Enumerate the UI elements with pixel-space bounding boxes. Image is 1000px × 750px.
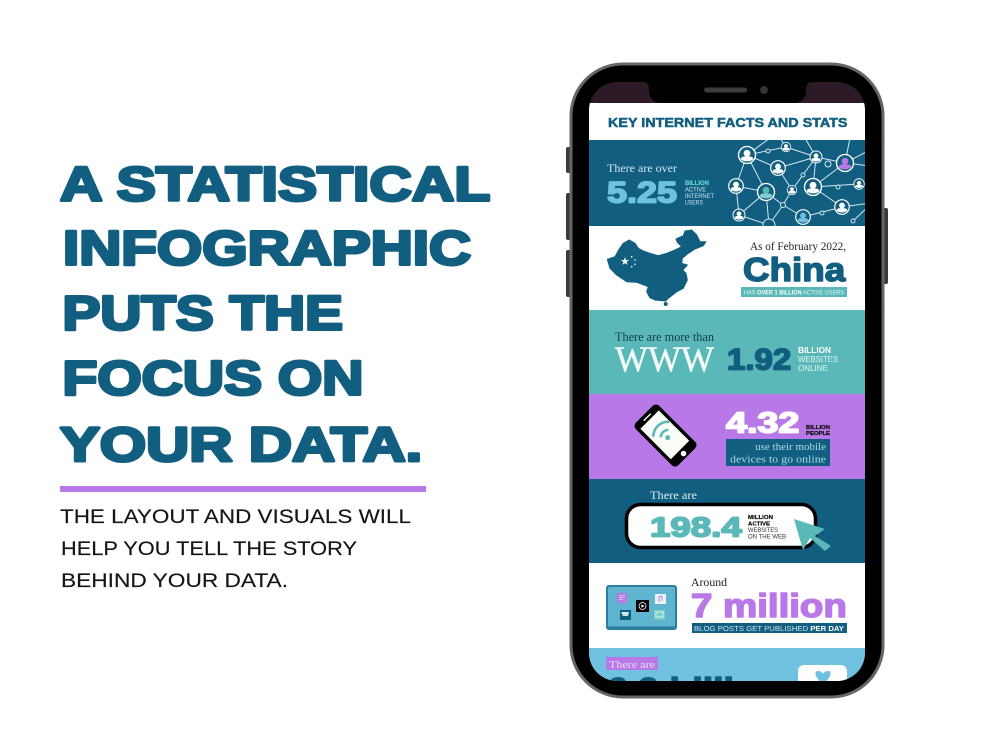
panel: active internet users: USERS xyxy=(685,200,704,206)
panel: China: As of February 2022, xyxy=(750,239,846,253)
phone screen xyxy=(589,82,870,708)
infographic title band xyxy=(589,103,865,140)
main heading: PUTS THE xyxy=(62,287,343,340)
panel: mobile users: PEOPLE xyxy=(806,431,830,437)
purple heading rule xyxy=(60,486,426,492)
description text xyxy=(60,506,411,592)
panel: mobile users: BILLION xyxy=(806,425,830,431)
panel: China: HAS OVER 1 BILLION ACTIVE USERS xyxy=(744,290,845,296)
panel: websites online: WWW xyxy=(615,339,714,379)
phone mockup xyxy=(566,64,888,708)
main heading xyxy=(60,158,490,472)
phone notch xyxy=(645,82,810,103)
panel: active internet users: ACTIVE xyxy=(685,186,707,194)
panel: websites online: WEBSITES xyxy=(798,355,838,364)
icon: tablet with app icons xyxy=(606,585,677,630)
camera xyxy=(760,86,768,94)
panel: websites online: BILLION xyxy=(798,346,831,355)
phone side buttons xyxy=(566,147,888,297)
panel: websites online xyxy=(589,310,865,394)
panel: active internet users: 5.25 xyxy=(607,176,677,210)
panel: active websites: 198.4 xyxy=(650,511,742,543)
infographic title band: KEY INTERNET FACTS AND STATS xyxy=(608,116,847,130)
panel: active internet users: There are over xyxy=(607,161,677,175)
panel: active internet users: INTERNET xyxy=(685,193,714,200)
description text: HELP YOU TELL THE STORY xyxy=(61,538,357,560)
main heading: FOCUS ON xyxy=(62,352,363,405)
panel: active internet users: BILLION xyxy=(685,181,709,187)
icon: cursor arrow xyxy=(794,519,831,551)
panel: active internet users xyxy=(589,138,870,231)
description text: THE LAYOUT AND VISUALS WILL xyxy=(60,506,411,528)
panel: cropped light blue stat: There are xyxy=(609,659,655,671)
panel: websites online: ONLINE xyxy=(798,364,828,373)
panel: blog posts xyxy=(589,563,865,648)
panel: China xyxy=(589,226,865,310)
icon: people network xyxy=(728,140,865,226)
main heading: A STATISTICAL xyxy=(60,158,490,211)
panel: mobile users xyxy=(589,394,865,479)
icon: China map xyxy=(607,230,706,306)
panel: mobile users: use their mobile xyxy=(755,441,826,453)
panel: active websites: There are xyxy=(650,488,697,502)
panel: cropped light blue stat: 6.9 billion xyxy=(607,672,780,708)
panel: active websites: WEBSITES xyxy=(748,528,778,534)
panel: active websites: ON THE WEB xyxy=(748,534,786,540)
main heading: YOUR DATA. xyxy=(60,418,422,472)
main heading: INFOGRAPHIC xyxy=(63,222,471,275)
panel: blog posts: Around xyxy=(691,577,727,589)
panel: blog posts: 7 million xyxy=(691,588,847,624)
panel: active websites: MILLION xyxy=(748,515,773,521)
icon: mobile phone with wifi xyxy=(634,404,696,466)
panel: websites online: There are more than xyxy=(615,330,715,344)
panel: mobile users: devices to go online xyxy=(730,454,826,466)
panel: mobile users: 4.32 xyxy=(726,407,799,439)
panel: China: China xyxy=(743,252,846,289)
panel: cropped light blue stat xyxy=(589,648,865,681)
panel: websites online: 1.92 xyxy=(727,342,791,376)
panel: active websites xyxy=(589,479,865,563)
phone body xyxy=(571,64,883,697)
speaker xyxy=(704,88,747,92)
wallpaper strip xyxy=(589,82,865,104)
panel: active websites: ACTIVE xyxy=(748,522,770,528)
panel: blog posts: BLOG POSTS GET PUBLISHED PER DAY xyxy=(694,624,844,633)
description text: BEHIND YOUR DATA. xyxy=(61,570,288,592)
